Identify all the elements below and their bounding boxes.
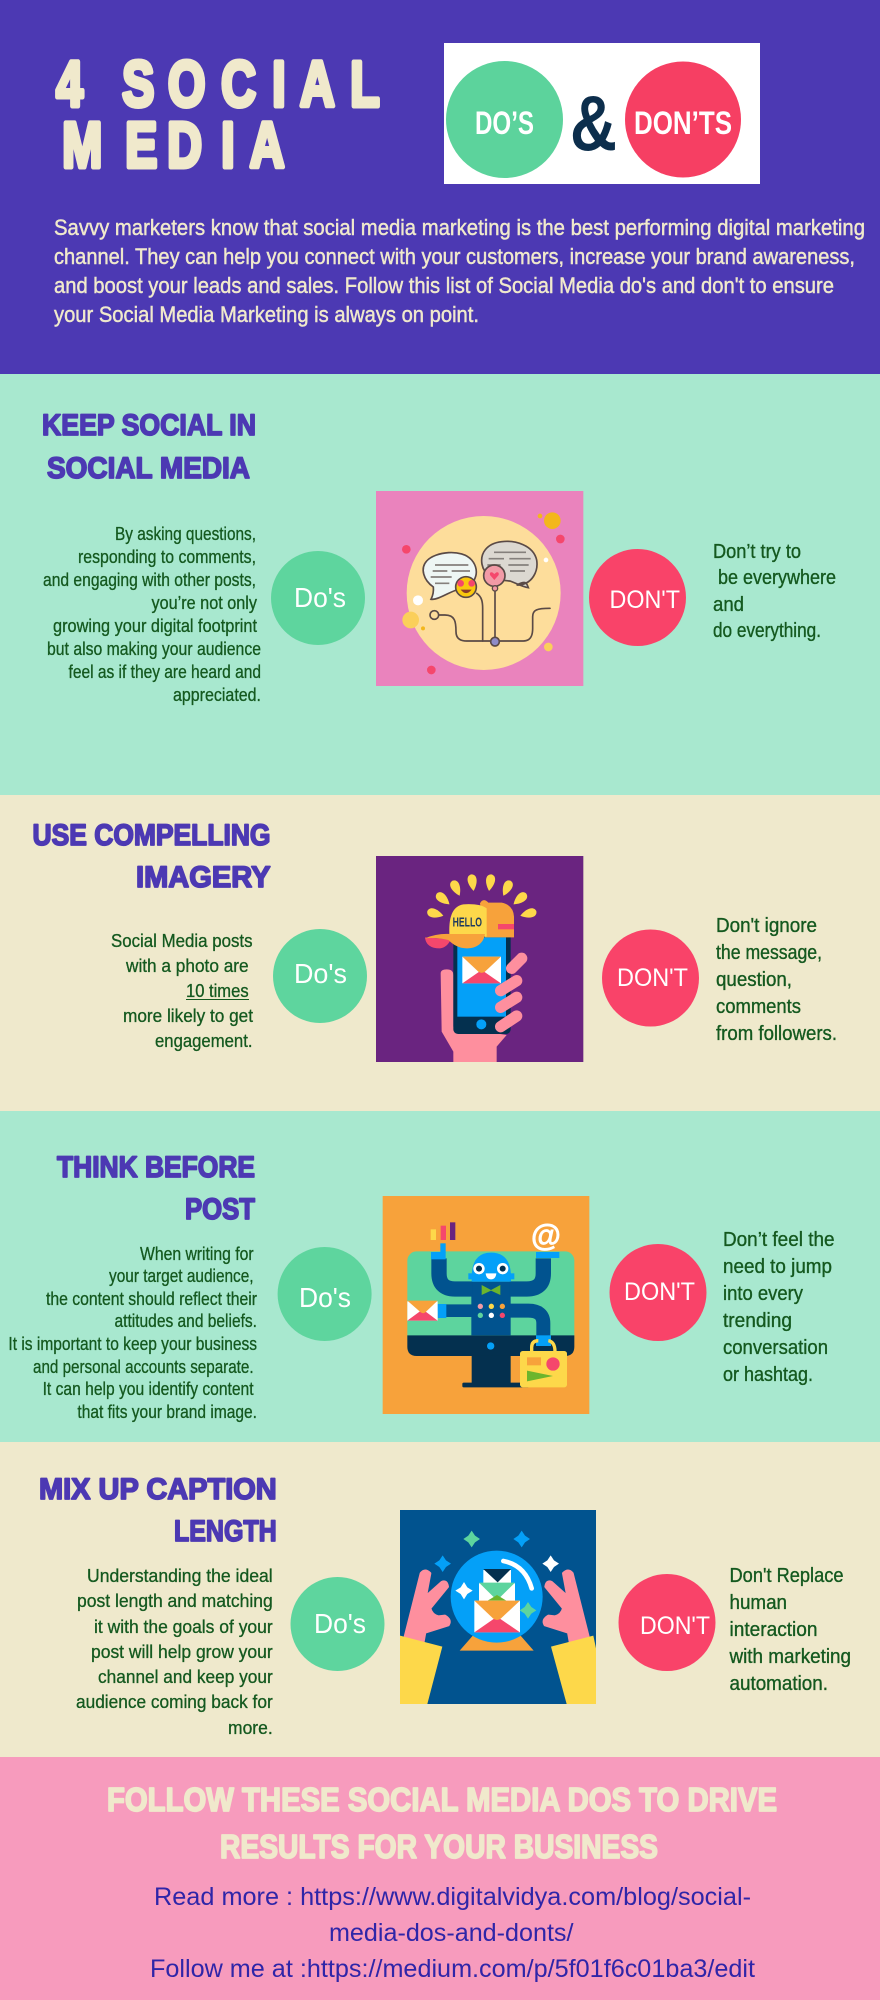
logo: do's and don'ts	[444, 43, 760, 184]
do's badge	[271, 551, 365, 645]
panel: mix up caption length	[0, 1442, 880, 1757]
panel: think before post	[0, 1111, 880, 1442]
do's badge: Do's	[294, 582, 346, 613]
don't badge: DON'T	[624, 1278, 695, 1306]
don't text: from followers.	[716, 1023, 837, 1045]
don't text: conversation	[723, 1337, 828, 1359]
illustration: robot at monitor: @	[531, 1218, 561, 1252]
do's text: more.	[228, 1718, 273, 1738]
don't text: do everything.	[713, 620, 821, 642]
heading: USE COMPELLING	[32, 819, 270, 852]
footer links: Follow me at :https://medium.com/p/5f01f6c01ba3/edit	[150, 1955, 755, 1983]
don't text: human	[730, 1592, 787, 1614]
don't text: the message,	[716, 942, 822, 964]
illustration: crystal ball	[400, 1510, 596, 1704]
don't text: interaction	[730, 1619, 818, 1641]
don't text	[716, 915, 837, 1045]
don't text: with marketing	[729, 1646, 851, 1668]
don't badge	[618, 1574, 716, 1671]
don't text: Don't Replace	[730, 1565, 844, 1587]
heading: SOCIAL MEDIA	[47, 452, 250, 485]
heading: IMAGERY	[136, 861, 270, 894]
intro paragraph: your Social Media Marketing is always on point.	[54, 302, 479, 327]
intro paragraph	[54, 215, 865, 327]
footer heading: FOLLOW THESE SOCIAL MEDIA DOS TO DRIVE	[107, 1781, 777, 1818]
panel: footer	[0, 1757, 880, 2000]
do's text: growing your digital footprint	[53, 616, 257, 636]
panel: keep social in social media	[0, 374, 880, 795]
title: MEDIA	[62, 109, 284, 181]
do's text: the content should reflect their	[46, 1289, 257, 1309]
don't badge	[602, 930, 699, 1026]
do's text	[43, 524, 261, 705]
heading	[42, 409, 256, 485]
do's text: your target audience,	[109, 1266, 254, 1286]
do's text: 10 times	[186, 981, 249, 1001]
do's text: engagement.	[155, 1031, 252, 1051]
don't text: Don't ignore	[716, 915, 817, 937]
don't text	[723, 1229, 834, 1386]
don't badge: DON'T	[640, 1612, 710, 1640]
do's badge: Do's	[294, 958, 347, 989]
don't text	[729, 1565, 851, 1695]
don't text: Don’t try to	[713, 541, 801, 563]
do's text	[111, 931, 253, 1051]
do's text: with a photo are	[125, 956, 249, 976]
heading: MIX UP CAPTION	[39, 1473, 277, 1506]
do's text: you’re not only	[152, 593, 257, 613]
panel: use compelling imagery	[0, 795, 880, 1111]
don't text: be everywhere	[718, 567, 836, 589]
do's text: When writing for	[140, 1244, 254, 1264]
don't text: Don’t feel the	[723, 1229, 834, 1251]
don't text: need to jump	[723, 1256, 832, 1278]
don't badge: DON'T	[617, 964, 688, 992]
heading	[32, 819, 270, 894]
illustration: phone in hand with cap: HELLO	[453, 915, 482, 930]
do's badge: Do's	[314, 1608, 366, 1639]
logo: do's and don'ts: DO’S	[475, 105, 534, 141]
do's text	[76, 1566, 273, 1738]
don't text: trending	[723, 1310, 792, 1332]
heading: KEEP SOCIAL IN	[42, 409, 256, 442]
do's text: Understanding the ideal	[87, 1566, 273, 1586]
do's text: responding to comments,	[78, 547, 256, 567]
footer heading	[107, 1781, 777, 1865]
do's text: appreciated.	[173, 685, 261, 705]
don't text: and	[713, 594, 744, 616]
do's badge	[290, 1577, 384, 1671]
heading: THINK BEFORE	[57, 1151, 255, 1184]
don't badge: DON'T	[610, 586, 680, 614]
don't text: into every	[723, 1283, 803, 1305]
illustration: phone in hand with cap	[376, 856, 583, 1062]
do's text: attitudes and beliefs.	[114, 1311, 257, 1331]
don't text	[713, 541, 836, 642]
title: 4 SOCIAL	[56, 48, 380, 120]
don't badge	[589, 549, 686, 646]
don't badge	[610, 1244, 706, 1341]
illustration: chat bubbles	[376, 491, 583, 686]
do's text: it with the goals of your	[94, 1617, 273, 1637]
do's text: channel and keep your	[98, 1667, 273, 1687]
do's text: that fits your brand image.	[77, 1402, 257, 1422]
do's text: and personal accounts separate.	[33, 1357, 254, 1377]
do's text: By asking questions,	[115, 524, 256, 544]
do's badge: Do's	[299, 1282, 351, 1313]
do's text: post length and matching	[77, 1591, 273, 1611]
do's text: It is important to keep your business	[8, 1334, 257, 1354]
do's text: more likely to get	[123, 1006, 253, 1026]
don't text: automation.	[730, 1673, 828, 1695]
do's text: audience coming back for	[76, 1692, 273, 1712]
panel: header	[0, 0, 880, 374]
footer links: media-dos-and-donts/	[329, 1919, 574, 1947]
heading: LENGTH	[174, 1515, 277, 1548]
do's badge	[273, 929, 367, 1023]
do's text: It can help you identify content	[43, 1379, 254, 1399]
footer links: Read more : https://www.digitalvidya.com/blog/social-	[154, 1883, 751, 1911]
don't text: question,	[716, 969, 792, 991]
do's text	[8, 1244, 257, 1422]
logo: do's and don'ts: DON’TS	[634, 105, 732, 141]
illustration: robot at monitor	[383, 1196, 589, 1414]
don't text: comments	[716, 996, 801, 1018]
heading	[39, 1473, 277, 1548]
intro paragraph: and boost your leads and sales. Follow this list of Social Media do's and don't to ensure	[54, 273, 834, 298]
footer links	[150, 1883, 755, 1983]
heading	[57, 1151, 255, 1226]
do's badge	[278, 1247, 372, 1341]
do's text: feel as if they are heard and	[68, 662, 261, 682]
footer heading: RESULTS FOR YOUR BUSINESS	[220, 1828, 658, 1865]
logo: do's and don'ts: &	[570, 79, 617, 167]
do's text: and engaging with other posts,	[43, 570, 256, 590]
do's text: post will help grow your	[91, 1642, 273, 1662]
do's text: Social Media posts	[111, 931, 252, 951]
don't text: or hashtag.	[723, 1364, 813, 1386]
title	[56, 48, 380, 181]
heading: POST	[185, 1193, 255, 1226]
do's text: but also making your audience	[47, 639, 261, 659]
